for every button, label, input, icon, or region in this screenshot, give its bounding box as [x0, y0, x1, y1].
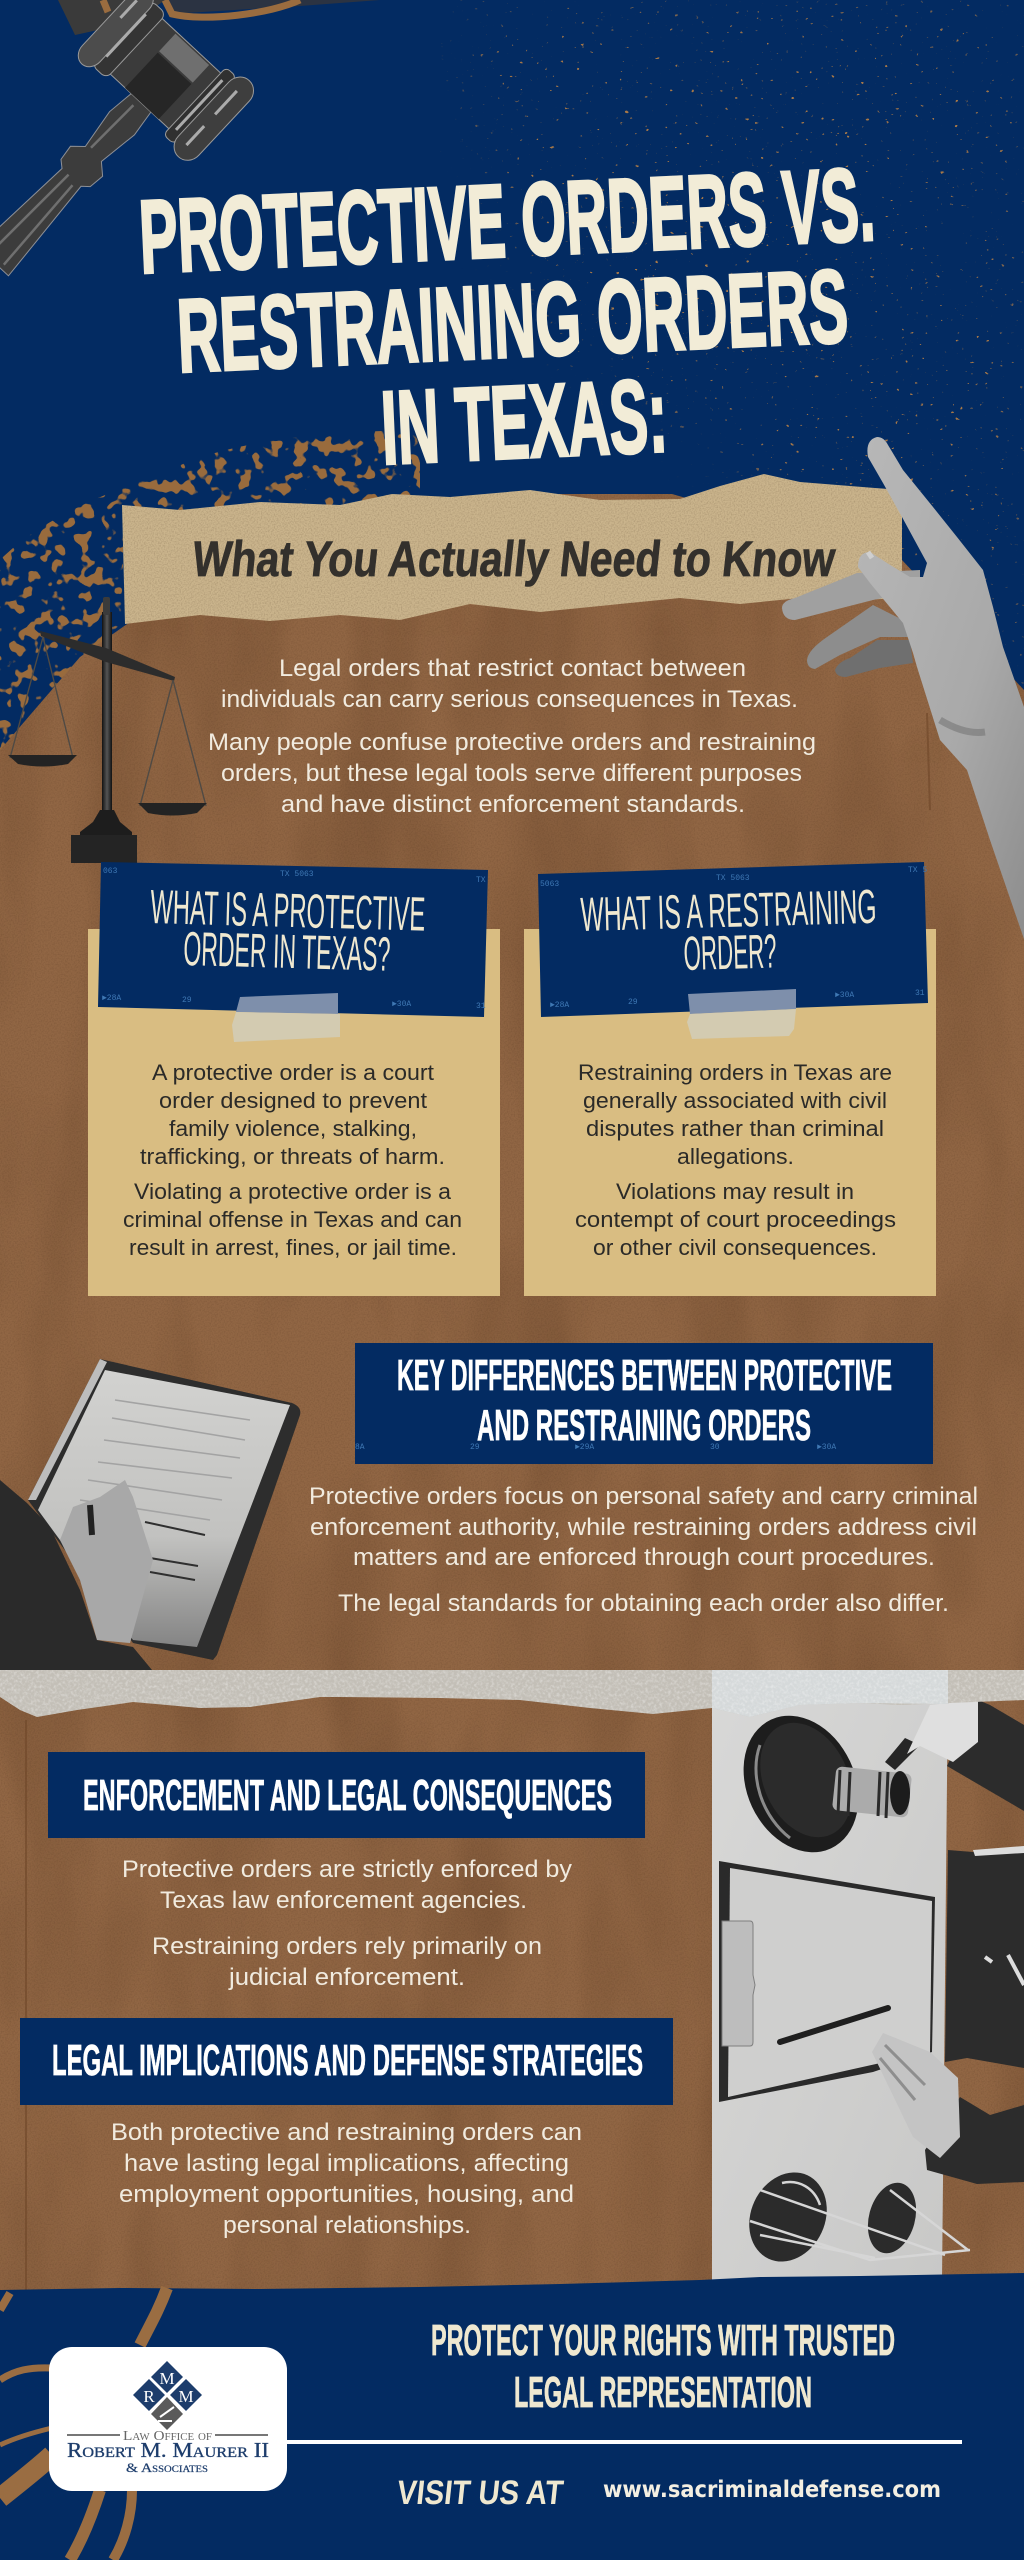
heading: protective order: 063 — [103, 867, 118, 876]
panel: protective order — [88, 862, 500, 1296]
intro text — [208, 655, 816, 818]
intro text: Legal orders that restrict contact between — [279, 655, 746, 682]
text: legal implications — [111, 2119, 582, 2239]
gavel handle — [0, 85, 160, 276]
visit us label: VISIT US AT — [395, 2474, 565, 2512]
tape — [687, 989, 796, 1039]
icon: gavel — [0, 0, 260, 315]
heading: key differences: 8A — [355, 1443, 365, 1452]
body text: Violations may result in — [616, 1179, 854, 1204]
body text: Restraining orders in Texas are — [578, 1060, 892, 1085]
intro text: orders, but these legal tools serve different purposes — [221, 760, 802, 787]
heading: restraining order: ORDER? — [683, 925, 777, 981]
gavel block — [722, 1697, 978, 1871]
text: key differences: matters and are enforced through court procedures. — [353, 1544, 935, 1571]
heading: restraining order: 29 — [628, 998, 638, 1007]
subtitle torn strip — [120, 470, 910, 630]
text: key differences — [309, 1483, 978, 1617]
little finger — [835, 640, 913, 677]
heading: restraining order: ►28A — [550, 1001, 569, 1010]
ring finger — [807, 605, 910, 669]
text: enforcement: judicial enforcement. — [228, 1964, 465, 1991]
logo: Law Office of — [123, 2429, 212, 2444]
image: hand signing document on clipboard — [0, 1359, 300, 1670]
divider line — [286, 2440, 962, 2444]
title — [137, 147, 877, 487]
website url: www.sacriminaldefense.com — [603, 2477, 941, 2503]
logo — [49, 2347, 287, 2491]
heading: protective order: 31 — [476, 1002, 486, 1011]
logo: & Associates — [126, 2460, 208, 2475]
footer heading — [431, 2316, 895, 2417]
text: enforcement — [122, 1856, 572, 1991]
document sheet — [38, 1370, 290, 1647]
heading: restraining order: ►30A — [835, 991, 854, 1000]
body text: A protective order is a court — [152, 1060, 434, 1085]
heading: protective order: ►28A — [102, 994, 121, 1003]
top corner torn piece — [58, 0, 380, 35]
sleeve — [0, 1480, 152, 1670]
body text: generally associated with civil — [583, 1088, 887, 1113]
heading: protective order: TX — [476, 876, 486, 885]
text: legal implications: personal relationships. — [223, 2212, 471, 2239]
writing hand — [60, 1480, 153, 1643]
icon: pointing hand — [782, 437, 1024, 939]
palm and index finger — [858, 437, 1024, 939]
heading: protective order: ►30A — [392, 1000, 411, 1009]
brown splatter — [0, 431, 420, 750]
body text: trafficking, or threats of harm. — [140, 1144, 445, 1169]
text: key differences: Protective orders focus on personal safety and carry criminal — [309, 1483, 978, 1510]
logo: M — [159, 2369, 175, 2388]
heading: restraining order: 31 — [915, 989, 925, 998]
intro text: Many people confuse protective orders and restraining — [208, 729, 816, 756]
heading: protective order: 29 — [182, 996, 192, 1005]
body text: result in arrest, fines, or jail time. — [129, 1235, 457, 1260]
heading: restraining order: 5063 — [540, 880, 559, 889]
hand on clipboard — [872, 2033, 960, 2158]
text: key differences: The legal standards for obtaining each order also differ. — [338, 1590, 949, 1617]
title: IN TEXAS: — [379, 358, 670, 487]
image: desk with gavel, clipboard and scales — [712, 1680, 1024, 2280]
body text: contempt of court proceedings — [575, 1207, 896, 1232]
panel: restraining order — [524, 862, 936, 1296]
text: enforcement: Protective orders are strictly enforced by — [122, 1856, 572, 1883]
heading: protective order: ORDER IN TEXAS? — [183, 923, 391, 982]
clipboard — [28, 1359, 300, 1660]
heading: key differences — [355, 1343, 933, 1464]
spine — [28, 1359, 107, 1500]
sleeve: upper — [947, 1700, 1024, 1811]
body text: or other civil consequences. — [593, 1235, 877, 1260]
fine paint speckles — [441, 0, 1024, 684]
logo: Robert M. Maurer II — [67, 2438, 269, 2462]
heading: legal implications — [20, 2018, 673, 2105]
text: legal implications: employment opportunities, housing, and — [119, 2181, 574, 2208]
text: enforcement: Texas law enforcement agencies. — [160, 1887, 527, 1914]
heading: protective order: WHAT IS A PROTECTIVE — [150, 881, 426, 942]
heading: key differences: 29 — [470, 1443, 480, 1452]
pen — [780, 2008, 888, 2042]
body text — [123, 1060, 462, 1260]
clipboard — [719, 1861, 935, 2102]
text: key differences: enforcement authority, while restraining orders address civil — [310, 1514, 977, 1541]
heading: key differences: ►29A — [575, 1443, 594, 1452]
body text: disputes rather than criminal — [586, 1116, 884, 1141]
footer band — [0, 2273, 1024, 2560]
heading: key differences: ►30A — [817, 1443, 836, 1452]
heading: restraining order: TX 5063 — [716, 874, 750, 883]
logo: M — [178, 2387, 194, 2406]
intro text: individuals can carry serious consequences in Texas. — [221, 686, 798, 713]
text: legal implications: Both protective and restraining orders can — [111, 2119, 582, 2146]
intro text: and have distinct enforcement standards. — [281, 791, 745, 818]
sleeve: lower — [925, 2097, 1024, 2184]
icon: scales of justice — [8, 597, 207, 863]
brown paper panel — [0, 480, 1024, 2310]
body text: allegations. — [677, 1144, 794, 1169]
heading: key differences: 30 — [710, 1443, 720, 1452]
text: legal implications: have lasting legal implications, affecting — [124, 2150, 569, 2177]
body text: Violating a protective order is a — [134, 1179, 452, 1204]
subtitle text: What You Actually Need to Know — [190, 531, 839, 587]
gavel head — [72, 0, 260, 166]
heading: protective order: TX 5063 — [280, 870, 314, 879]
sleeve: middle — [945, 1848, 1024, 2068]
text: enforcement: Restraining orders rely primarily on — [152, 1933, 542, 1960]
heading: enforcement — [48, 1752, 645, 1838]
middle finger — [782, 570, 920, 620]
logo: R — [143, 2387, 155, 2406]
heading: restraining order — [538, 862, 928, 1017]
document lines — [80, 1400, 250, 1520]
body text: family violence, stalking, — [169, 1116, 417, 1141]
heading: protective order — [98, 862, 488, 1017]
body text: order designed to prevent — [159, 1088, 427, 1113]
body text: criminal offense in Texas and can — [123, 1207, 462, 1232]
torn paper band — [0, 1670, 1024, 1717]
heading: restraining order: TX 5 — [908, 866, 927, 875]
scales on desk — [735, 2160, 970, 2274]
tape — [232, 993, 340, 1042]
body text — [575, 1060, 896, 1260]
